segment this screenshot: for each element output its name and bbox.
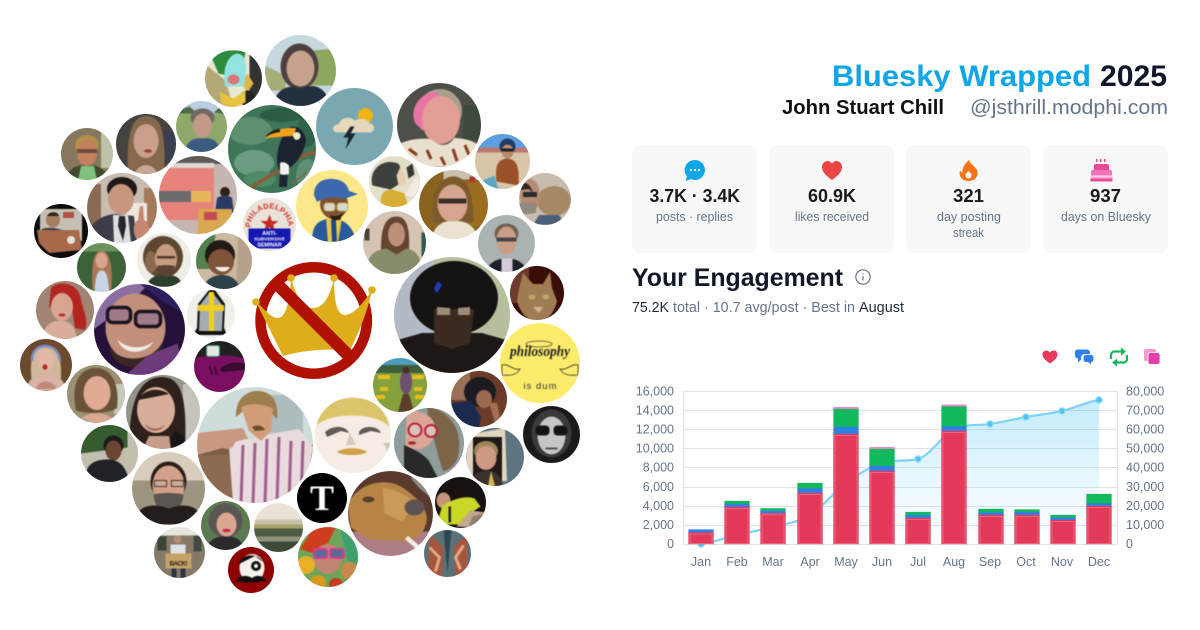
line dots bbox=[698, 397, 1102, 547]
icon: flame bbox=[960, 160, 978, 181]
title: Bluesky Wrapped bbox=[832, 60, 1091, 93]
engagement summary bbox=[632, 300, 904, 316]
avatar: Philadelphia Anti-Subversive Seminar: SUBVERSIVE bbox=[254, 236, 286, 242]
left axis labels bbox=[636, 384, 674, 551]
month labels bbox=[691, 555, 1110, 569]
avatar: person with dark curls bbox=[451, 371, 507, 427]
avatar: blurred landscape bbox=[254, 503, 303, 552]
bar: May bbox=[834, 407, 858, 544]
icon: chat bubble bbox=[685, 160, 705, 181]
icon: legend replies bbox=[1075, 349, 1094, 364]
avatar: older man in suit bbox=[478, 215, 535, 272]
user name and handle: @jsthrill.modphi.com bbox=[970, 97, 1168, 119]
avatar: woman selfie outdoors bbox=[265, 35, 336, 106]
stat card: likes received bbox=[769, 145, 894, 253]
avatar: man in suit pointing bbox=[87, 173, 157, 243]
left axis labels: 10,000 bbox=[636, 442, 674, 456]
stat card: day posting streak: day posting bbox=[937, 209, 1001, 224]
avatar: philosophy is dum bbox=[500, 323, 580, 403]
stat card: posts and replies: 3.7K · 3.4K bbox=[650, 186, 740, 206]
icon: heart bbox=[822, 161, 842, 180]
right axis labels: 50,000 bbox=[1126, 442, 1164, 456]
bar: Oct bbox=[1014, 510, 1040, 544]
title: 2025 bbox=[1100, 60, 1167, 93]
stat card: day posting streak: 321 bbox=[953, 186, 984, 206]
gridlines bbox=[683, 391, 1118, 544]
bar: Mar bbox=[760, 508, 786, 544]
avatar: person with sunflower sunglasses bbox=[298, 527, 358, 587]
heading: your engagement: Your Engagement bbox=[632, 264, 844, 292]
avatar: sunglasses black and white bbox=[522, 406, 580, 462]
month labels: Sep bbox=[979, 555, 1001, 569]
left axis labels: 2,000 bbox=[643, 518, 674, 532]
avatar: older man bbox=[176, 101, 227, 152]
cumulative area bbox=[701, 400, 1099, 544]
avatar: purple face with cap bbox=[194, 341, 245, 392]
cumulative line bbox=[701, 400, 1099, 544]
right axis labels: 20,000 bbox=[1126, 499, 1164, 513]
avatar: man with laptop bbox=[34, 204, 88, 258]
avatar: woman with red glasses bbox=[394, 408, 464, 478]
engagement summary: 75.2K bbox=[632, 300, 669, 316]
left axis labels: 12,000 bbox=[636, 422, 674, 436]
stat card: posts and replies bbox=[632, 145, 757, 253]
avatar: philosophy is dum: is dum bbox=[524, 381, 557, 392]
month labels: Apr bbox=[800, 555, 820, 569]
avatar: bearded man with glasses bbox=[132, 452, 205, 525]
avatar: cartoon creature reading bbox=[205, 50, 262, 107]
avatar: protester with sign bbox=[154, 527, 205, 578]
stat card: days on Bluesky: 937 bbox=[1090, 186, 1121, 206]
stat card: posts and replies: posts · replies bbox=[656, 209, 733, 224]
avatar: person in yellow shirt with microphone bbox=[434, 476, 486, 528]
avatar: tabby cat bbox=[510, 266, 564, 320]
right axis labels: 80,000 bbox=[1126, 384, 1164, 398]
avatar: woman on beach bbox=[475, 134, 530, 189]
left axis labels: 8,000 bbox=[643, 460, 674, 474]
right axis labels: 40,000 bbox=[1126, 460, 1164, 474]
avatar: pink hair person bbox=[397, 83, 481, 167]
left axis labels: 14,000 bbox=[636, 404, 674, 418]
avatar: man with glasses, green shirt bbox=[61, 128, 113, 180]
bar: Nov bbox=[1050, 515, 1076, 544]
avatar: man with curly hair bbox=[137, 233, 191, 287]
month labels: Feb bbox=[726, 555, 748, 569]
month labels: Nov bbox=[1051, 555, 1074, 569]
right axis labels: 70,000 bbox=[1126, 404, 1164, 418]
avatar: golden retriever with cigarette bbox=[348, 470, 432, 556]
stat card: days on Bluesky: days on Bluesky bbox=[1061, 209, 1151, 224]
avatar: blonde woman with headphones bbox=[20, 339, 72, 391]
left axis labels: 4,000 bbox=[643, 499, 674, 513]
right axis labels: 0 bbox=[1126, 537, 1133, 551]
engagement summary: total · 10.7 avg/post · Best in bbox=[673, 300, 855, 316]
bar: Aug bbox=[942, 404, 966, 544]
bar: Dec bbox=[1086, 494, 1112, 544]
avatar: man in dark hoodie bbox=[81, 425, 138, 482]
user name and handle: John Stuart Chill bbox=[782, 97, 944, 119]
avatar: blond man in selfie bbox=[466, 428, 524, 486]
avatar: comic drawing bbox=[369, 156, 420, 207]
avatar: protester with sign: BACK! bbox=[169, 560, 187, 567]
left axis labels: 6,000 bbox=[643, 480, 674, 494]
month labels: Jul bbox=[910, 555, 926, 569]
bar: Sep bbox=[978, 509, 1004, 544]
avatar: woman with dark hair bbox=[126, 375, 200, 449]
stat card: day posting streak bbox=[906, 145, 1031, 253]
month labels: Jun bbox=[872, 555, 892, 569]
icon: info bbox=[856, 270, 870, 284]
avatar: smiling child bbox=[196, 233, 252, 289]
avatar: New York Times logo bbox=[297, 473, 347, 523]
avatar: man with afro bbox=[394, 257, 510, 373]
stat card: day posting streak: streak bbox=[953, 225, 984, 240]
right axis labels bbox=[1126, 384, 1164, 551]
avatar: thunderstorm icon bbox=[316, 88, 393, 165]
stat card: likes received: likes received bbox=[795, 209, 869, 224]
month labels: Jan bbox=[691, 555, 711, 569]
avatar: cartoon man with blue cap bbox=[296, 170, 368, 242]
avatar: toucan on branch bbox=[228, 105, 316, 193]
avatar: woman brown hair bbox=[116, 114, 176, 174]
bar: Apr bbox=[798, 483, 822, 544]
avatar: National Bohemian mascot bbox=[228, 547, 274, 593]
bar: Jul bbox=[906, 512, 930, 544]
left axis labels: 16,000 bbox=[636, 384, 674, 398]
bar: Jun bbox=[870, 447, 894, 544]
avatar: no-king badge bbox=[252, 262, 376, 379]
user name and handle bbox=[782, 97, 1168, 119]
avatar: Philadelphia Anti-Subversive Seminar: ANTI- bbox=[262, 231, 277, 237]
avatar: woman in olive shirt bbox=[363, 211, 426, 274]
avatar: sunflower field bbox=[373, 358, 427, 412]
stat card: likes received: 60.9K bbox=[808, 186, 856, 206]
icon: birthday cake bbox=[1090, 159, 1112, 182]
avatar: woman with glasses bbox=[419, 170, 488, 239]
icon: legend heart bbox=[1042, 350, 1058, 364]
avatar: woman with green trees bbox=[77, 243, 126, 292]
engagement summary: August bbox=[859, 300, 904, 316]
avatar: philosophy is dum: philosophy bbox=[508, 344, 570, 360]
chart: monthly engagement stacked bars with cumulative line bbox=[636, 384, 1164, 569]
month labels: May bbox=[834, 555, 859, 569]
avatar: woman with curly brown hair bbox=[67, 365, 125, 423]
month labels: Oct bbox=[1016, 555, 1036, 569]
avatar: bearded man with dog bbox=[519, 173, 571, 225]
avatar: man in striped shirt bbox=[197, 387, 313, 503]
avatar: Philadelphia Anti-Subversive Seminar bbox=[243, 198, 296, 251]
avatar: New York Times logo: T bbox=[310, 478, 334, 518]
month labels: Aug bbox=[943, 555, 965, 569]
avatar: woman with gray curls bbox=[201, 501, 250, 550]
chart legend bbox=[1042, 348, 1160, 366]
month labels: Dec bbox=[1088, 555, 1110, 569]
right axis labels: 10,000 bbox=[1126, 518, 1164, 532]
avatar: smiling man with glasses bbox=[94, 284, 185, 375]
avatar: red haired woman bbox=[36, 281, 94, 339]
avatar: Philadelphia Anti-Subversive Seminar: PHILADELPHIA bbox=[244, 202, 294, 228]
bar: Feb bbox=[724, 501, 750, 544]
month labels: Mar bbox=[762, 555, 784, 569]
bar: Jan bbox=[688, 530, 714, 544]
avatar: abstract painting bbox=[424, 530, 470, 576]
icon: legend reposts bbox=[1111, 348, 1127, 366]
avatar: speaker at presentation bbox=[159, 156, 237, 234]
avatar: crusader helm bbox=[187, 290, 235, 338]
avatar: Philadelphia Anti-Subversive Seminar: SEMINAR bbox=[257, 242, 282, 248]
avatar: cartoon blond man bbox=[315, 396, 391, 472]
icon: legend quotes bbox=[1144, 349, 1160, 364]
left axis labels: 0 bbox=[667, 537, 674, 551]
stat card: days on Bluesky bbox=[1043, 145, 1168, 253]
right axis labels: 60,000 bbox=[1126, 422, 1164, 436]
right axis labels: 30,000 bbox=[1126, 480, 1164, 494]
